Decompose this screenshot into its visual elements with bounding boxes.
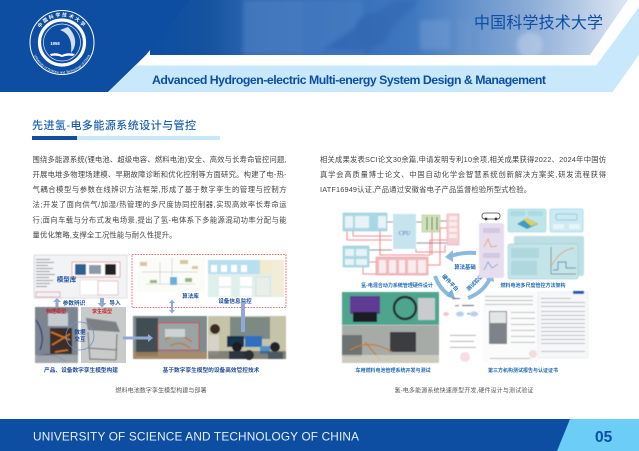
device monitoring dashboard (208, 260, 284, 305)
left text block (32, 155, 287, 240)
university logo (30, 10, 94, 75)
right text block: 相关成果发表SCI论文30余篇,申请发明专利10余项,相关成果获得2022、2024年中国仿 (320, 155, 606, 164)
footer bar (0, 419, 639, 451)
arrow: vertical exchange (169, 300, 175, 314)
digital twin model render: 孪生模型 (92, 308, 112, 315)
physical model photo: 物理模型 (46, 308, 66, 315)
figure caption right: 氢-电多能源系统快速原型开发,硬件设计与测试验证 (394, 386, 534, 394)
university name in Chinese: 中国科学技术大学 (474, 14, 603, 32)
CPU block: CPU (399, 231, 411, 237)
arrow: import: 导入 (109, 300, 121, 307)
university logo: 中国科学技术大学 (38, 12, 86, 28)
algorithm library diagram: 算法库 (182, 292, 199, 300)
twin exchange ring (66, 322, 94, 350)
right text block: IATF16949认证,产品通过安徽省电子产品监督检验所型式检验。 (320, 185, 531, 194)
left text block: 气耦合模型与参数在线辨识方法框架,形成了基于数字孪生的管理与控制方 (32, 185, 286, 194)
sub caption: vehicle testing: 车用燃料电池管理系统开发与测试 (355, 367, 431, 374)
section heading: 先进氢-电多能源系统设计与管控 (32, 118, 196, 132)
arrow: test verification (468, 278, 490, 298)
vehicle icon (482, 213, 500, 220)
algorithm library diagram (137, 257, 205, 300)
hardware design diagram (343, 213, 459, 275)
test bench photo (133, 316, 207, 359)
lab team photo (208, 316, 286, 360)
model library label: 模型库 (57, 274, 77, 284)
section heading (32, 118, 220, 140)
arrow: hardware platform (435, 276, 451, 296)
left text block: 法;开发了面向供气/加湿/热管理的多尺度协同控制器,实现高效率长寿命运 (32, 200, 287, 209)
left text block: 开展电堆多物理场建模、早期故障诊断和优化控制等方面研究。构建了电-热- (32, 170, 287, 179)
twin exchange ring: 交互 (74, 335, 86, 343)
university logo: 1958 (50, 41, 60, 46)
page number: 05 (595, 429, 613, 446)
left text block: 围绕多能源系统(锂电池、超级电容、燃料电池)安全、高效与长寿命管控问题, (32, 155, 286, 164)
sub caption: multi-scale method: 燃料电池多尺度管控方法架构 (500, 282, 566, 289)
model library screenshot (34, 255, 127, 298)
purple time-scale panel (479, 223, 504, 278)
right figure: hydrogen-electric prototype (342, 209, 588, 374)
header light strip (108, 7, 639, 92)
test report document (483, 292, 538, 362)
header banner (0, 0, 639, 92)
control logic panel (550, 209, 583, 232)
university logo: University of Science and Technology of China (34, 54, 90, 74)
left figure: fuel cell digital twin (34, 254, 286, 374)
sub caption: hardware: 氢-电混合动力系统管理硬件设计 (361, 282, 433, 289)
sub caption: third party testing: 第三方机构测试报告与认证证书 (488, 367, 558, 374)
white separator (136, 0, 639, 66)
circular arrows centre: 硬件平台 (440, 272, 461, 293)
header technology image band (150, 0, 628, 58)
twin exchange ring: 数据 (74, 328, 86, 336)
controller board photo (342, 292, 439, 325)
arrow: parameter identification (53, 298, 86, 307)
right text block: 真学会高质量博士论文、中国自动化学会智慧系统创新解决方案奖,研发流程获得 (320, 170, 606, 179)
certification flow (443, 298, 478, 362)
red dashed frame (132, 254, 286, 308)
surface plot panel (508, 209, 546, 232)
arrow: algorithm basis (451, 253, 476, 256)
arrow: import (98, 298, 121, 308)
digital twin model render (81, 307, 126, 363)
English section title: Advanced Hydrogen-electric Multi-energy System Design & Management (152, 73, 546, 87)
multi-scale control panel (508, 236, 584, 279)
left text block: 行;面向车载与分布式发电场景,提出了氢-电体系下多能源混动功率分配与能 (32, 216, 287, 224)
figure caption left: 燃料电池数字孪生模型构建与部署 (116, 386, 206, 394)
arrow: twin to control (123, 334, 153, 342)
header blue shape with logo area (0, 0, 190, 92)
right text block (320, 155, 606, 194)
certificate document (538, 291, 588, 358)
circular arrows centre: 算法基础 (454, 263, 476, 271)
arrow: parameter identification: 参数辨识 (63, 299, 86, 307)
left text block: 量优化策略,支撑全工况性能与耐久性提升。 (32, 230, 176, 240)
vehicle fuel cell test photo (342, 325, 439, 363)
physical model photo (35, 307, 78, 363)
circular arrows centre: 测试验证 (464, 272, 485, 293)
sub caption: control technology: 基于数字孪生模型的设备高效管控技术 (163, 366, 260, 374)
arrow: monitoring to lab (241, 302, 245, 332)
device monitoring dashboard: 设备信息监控 (218, 297, 252, 305)
heading underline (32, 136, 220, 140)
sub caption: product twin: 产品、设备数字孪生模型构建 (44, 366, 118, 374)
footer page number tab (557, 419, 639, 451)
footer university name: UNIVERSITY OF SCIENCE AND TECHNOLOGY OF CHINA (33, 430, 359, 444)
circular arrows centre (435, 250, 494, 299)
